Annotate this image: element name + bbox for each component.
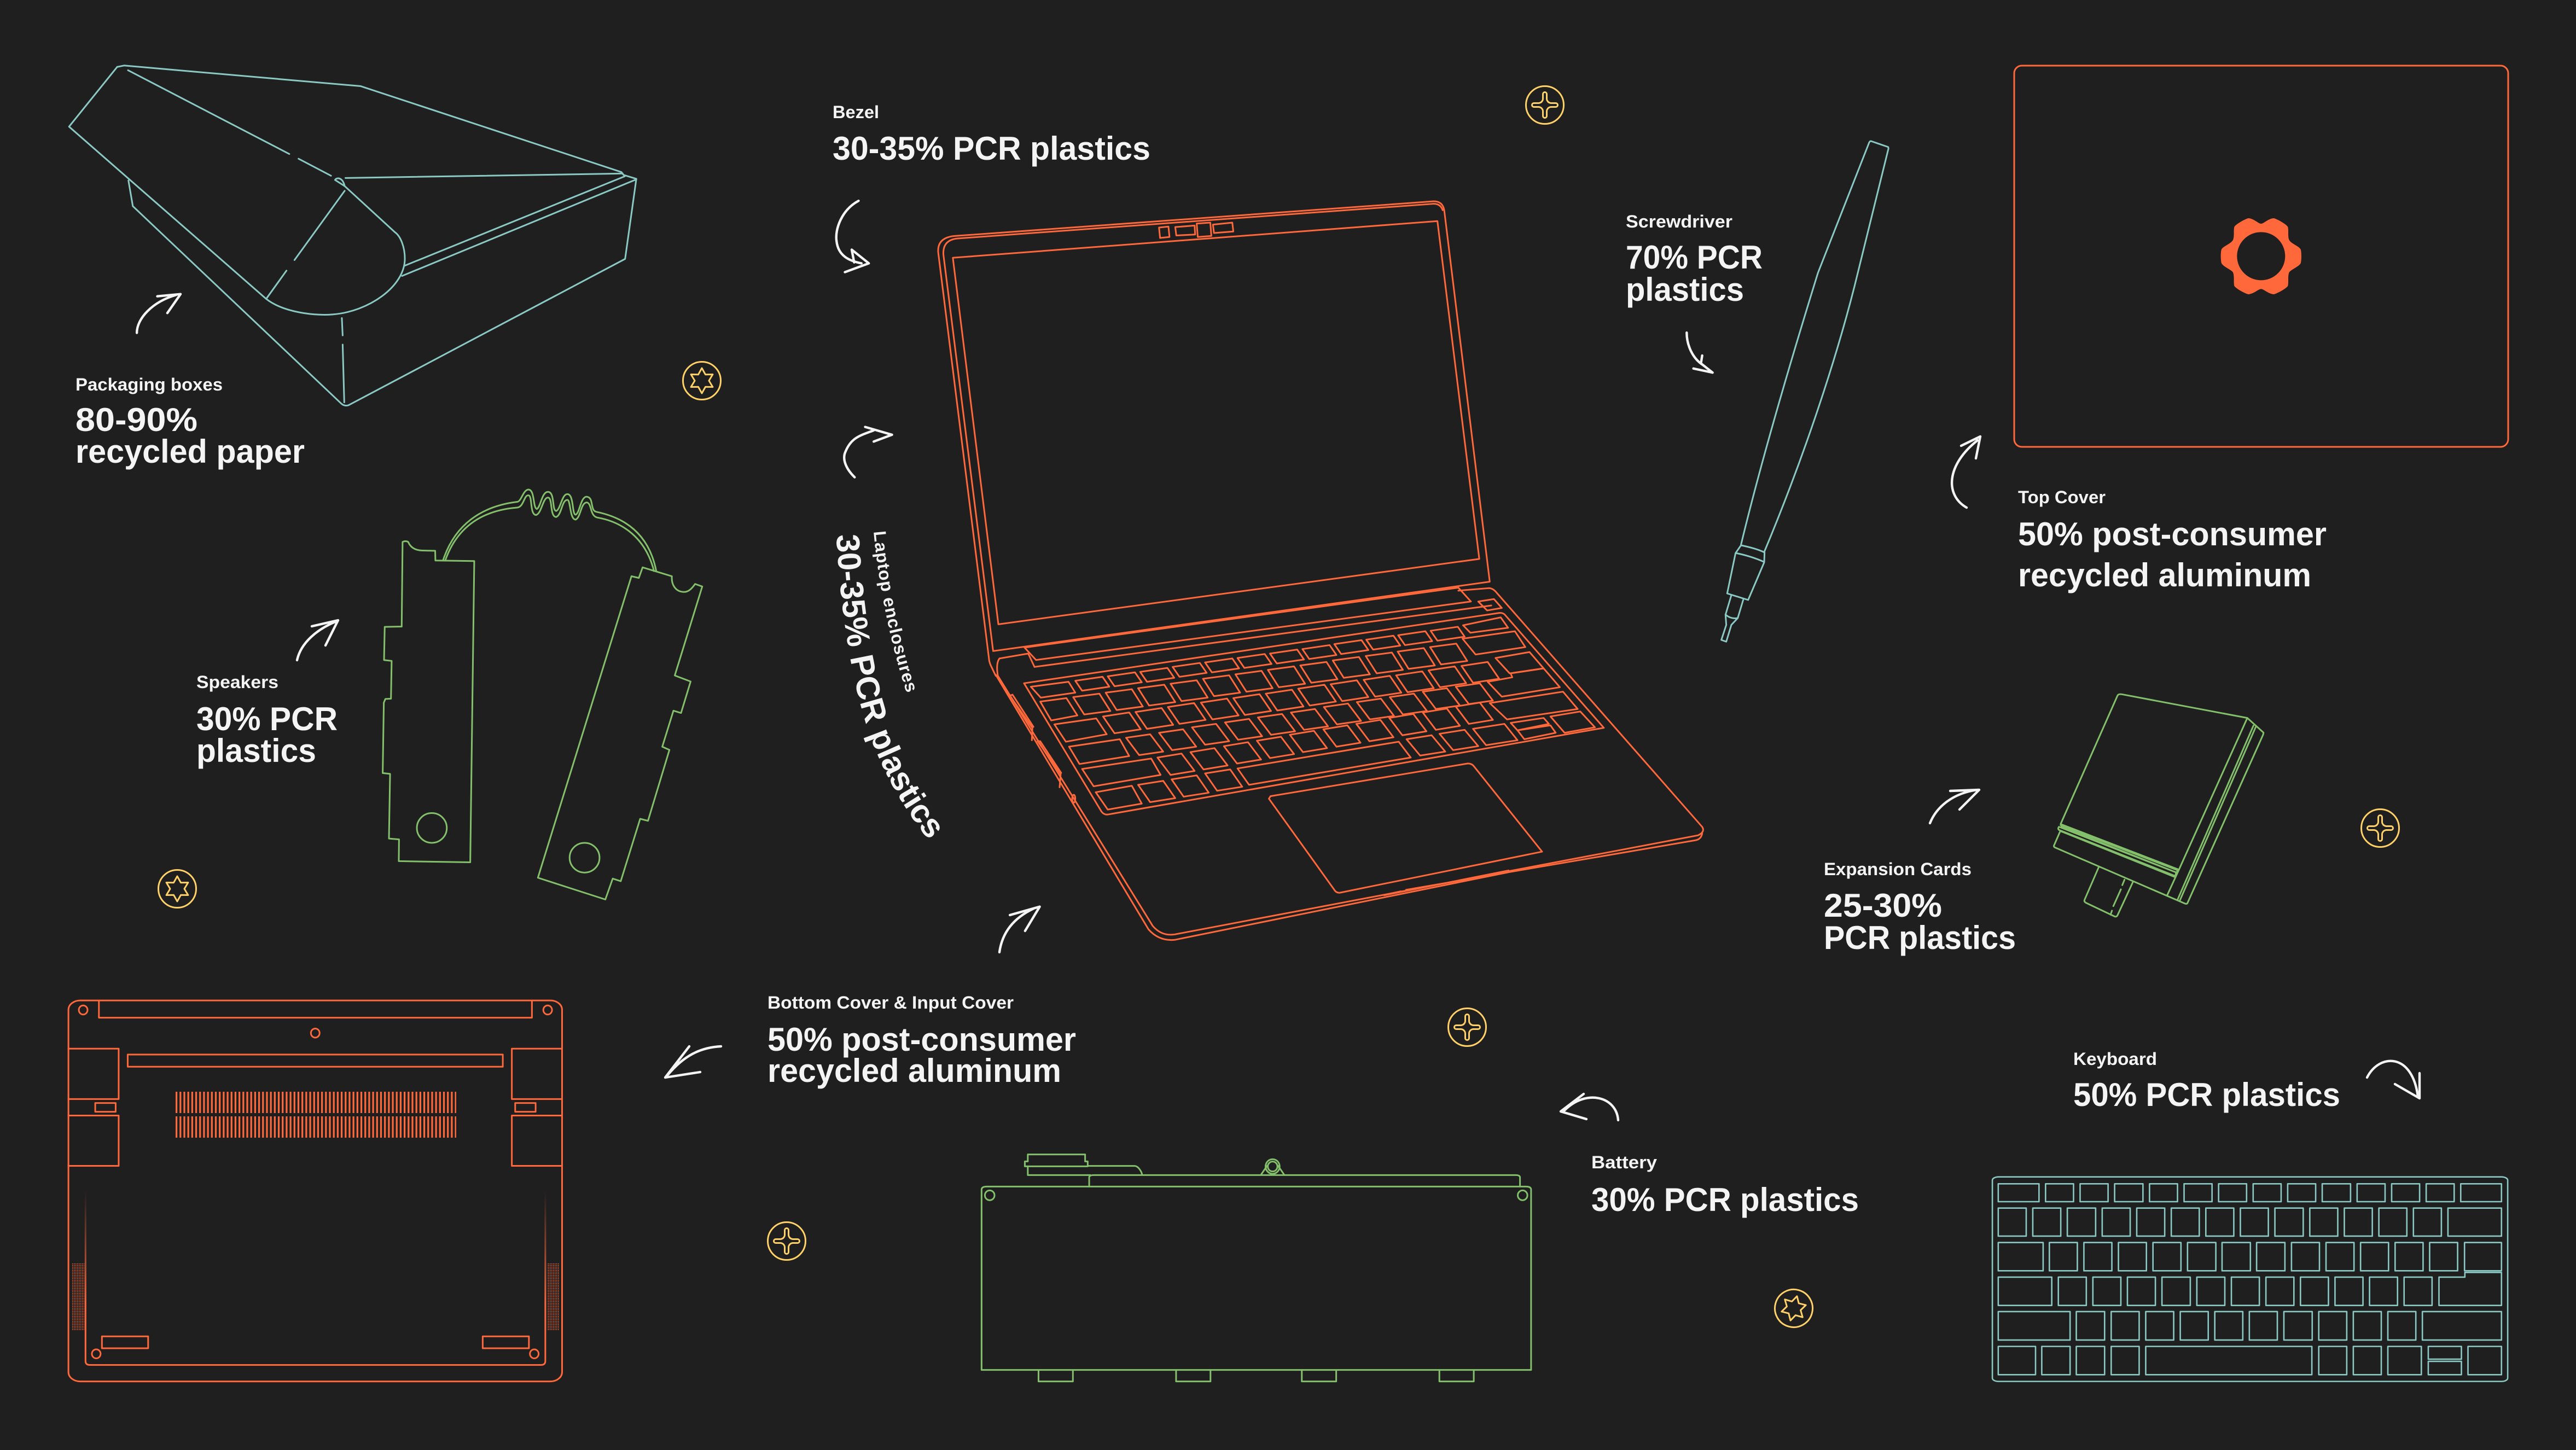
- icon: star screw lower right: [1771, 1285, 1817, 1331]
- text: expansion cards: PCR plastics: [1824, 919, 2016, 956]
- text: expansion cards: 25-30%: [1824, 887, 1942, 924]
- text: laptop enclosures on a curve: Laptop enclosures: [872, 532, 915, 692]
- arrow: battery: [1561, 1094, 1618, 1120]
- text: screwdriver: plastics: [1626, 271, 1744, 308]
- panel: top cover: [2014, 66, 2508, 447]
- text: battery: Battery: [1591, 1152, 1657, 1172]
- illustration: keyboard: [1992, 1177, 2508, 1382]
- text: speakers: [196, 672, 338, 769]
- illustration: screwdriver: [1722, 141, 1888, 642]
- text: keyboard: Keyboard: [2073, 1049, 2157, 1069]
- illustration: battery: [981, 1155, 1531, 1382]
- text: bottom cover: [767, 993, 1076, 1089]
- icon: plus screw right: [2361, 810, 2399, 847]
- text: top cover: 50% post-consumer: [2018, 516, 2327, 552]
- arrow: screwdriver: [1687, 333, 1713, 372]
- text: speakers: 30% PCR: [196, 701, 338, 737]
- text: keyboard: 50% PCR plastics: [2073, 1076, 2340, 1113]
- text: top cover: [2018, 487, 2327, 593]
- text: screwdriver: Screwdriver: [1626, 212, 1732, 231]
- arrow: to laptop base: [999, 907, 1040, 952]
- text: bottom cover: Bottom Cover & Input Cover: [767, 993, 1014, 1012]
- icon: plus screw center: [1449, 1009, 1486, 1046]
- text: bezel: Bezel: [833, 102, 879, 122]
- icon: plus screw top center: [1526, 86, 1563, 124]
- illustration: laptop: [938, 201, 1703, 940]
- text: packaging boxes: recycled paper: [75, 433, 305, 470]
- text: bottom cover: recycled aluminum: [767, 1052, 1061, 1089]
- text: bezel: 30-35% PCR plastics: [833, 130, 1150, 167]
- text: bezel: [833, 102, 1150, 167]
- text: battery: [1591, 1152, 1859, 1218]
- text: top cover: Top Cover: [2018, 487, 2106, 507]
- arrow: bottom cover to left: [665, 1046, 721, 1078]
- text: packaging boxes: Packaging boxes: [75, 375, 223, 394]
- text: expansion cards: Expansion Cards: [1824, 859, 1972, 879]
- speaker grilles: bottom cover: [72, 1263, 560, 1331]
- base and trackpad: [996, 588, 1703, 940]
- arrow: expansion cards: [1930, 790, 1979, 823]
- arrow: bezel: [836, 201, 869, 272]
- text: keyboard: [2073, 1049, 2340, 1113]
- keyboard keys: [1031, 618, 1595, 810]
- text: battery: 30% PCR plastics: [1591, 1181, 1859, 1218]
- text: laptop enclosures on a curve: 30-35% PCR plastics: [836, 535, 940, 837]
- text: packaging boxes: [75, 375, 305, 470]
- vents: bottom cover: [176, 1103, 456, 1127]
- arrow: top cover: [1952, 436, 1980, 508]
- text: bottom cover: 50% post-consumer: [767, 1021, 1076, 1058]
- text: screwdriver: [1626, 212, 1763, 308]
- text: top cover: recycled aluminum: [2018, 557, 2311, 593]
- icon: star screw left: [159, 870, 196, 908]
- lid and screen: [938, 201, 1491, 676]
- icon: plus screw lower left: [768, 1222, 805, 1260]
- text: screwdriver: 70% PCR: [1626, 239, 1763, 276]
- illustration: expansion card: [2054, 694, 2264, 917]
- arrow: keyboard: [2367, 1061, 2420, 1098]
- text: speakers: plastics: [196, 732, 316, 769]
- text: packaging boxes: 80-90%: [75, 401, 197, 438]
- arrow: packaging boxes: [137, 294, 181, 333]
- icon: star screw top left: [683, 362, 721, 399]
- arrow: laptop enclosures: [844, 427, 892, 477]
- icon: gear logo: [2221, 218, 2301, 294]
- illustration: bottom cover: [68, 1000, 562, 1382]
- arrow: speakers: [297, 620, 338, 660]
- illustration: speakers: [383, 490, 702, 899]
- illustration: packaging box: [69, 66, 636, 406]
- text: expansion cards: [1824, 859, 2016, 956]
- text: speakers: Speakers: [196, 672, 278, 692]
